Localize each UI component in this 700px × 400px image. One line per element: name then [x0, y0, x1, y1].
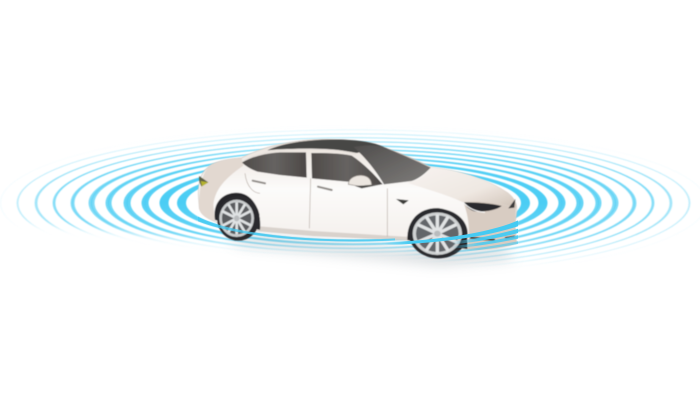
door handles [253, 181, 332, 190]
side windows [242, 152, 307, 178]
ring under car sill [198, 216, 395, 242]
front bumper [463, 201, 517, 249]
grille edge [508, 199, 515, 208]
wheel arch [215, 193, 260, 230]
ground shadow [225, 234, 515, 264]
hood [407, 167, 516, 208]
strong ring passing in front of front wheel [386, 220, 518, 245]
front wheel [407, 208, 468, 258]
tail light [199, 176, 208, 186]
illustration: car with surrounding sensor rings [16, 129, 691, 270]
car body [198, 139, 517, 249]
window trim [242, 149, 356, 162]
windshield [353, 145, 431, 184]
front spokes [417, 214, 457, 253]
sill shading [260, 226, 410, 240]
rear quarter shading [199, 158, 243, 222]
rear wheel [215, 193, 260, 241]
rings passing in front of bumper [454, 228, 518, 252]
rear tire [217, 196, 260, 241]
ring line weight along top and bottom arcs [18, 133, 690, 260]
side mirror [348, 175, 372, 186]
front tire [409, 209, 468, 258]
front wheel arch [407, 208, 468, 249]
roof [267, 140, 384, 153]
car [198, 139, 517, 258]
lower intake [470, 237, 515, 240]
rear spokes [222, 202, 251, 234]
door seams [245, 173, 387, 237]
sensor rings [16, 129, 691, 265]
headlight [463, 202, 502, 211]
fender vent [396, 199, 409, 204]
rear rim [219, 200, 254, 237]
front rim [413, 212, 462, 255]
